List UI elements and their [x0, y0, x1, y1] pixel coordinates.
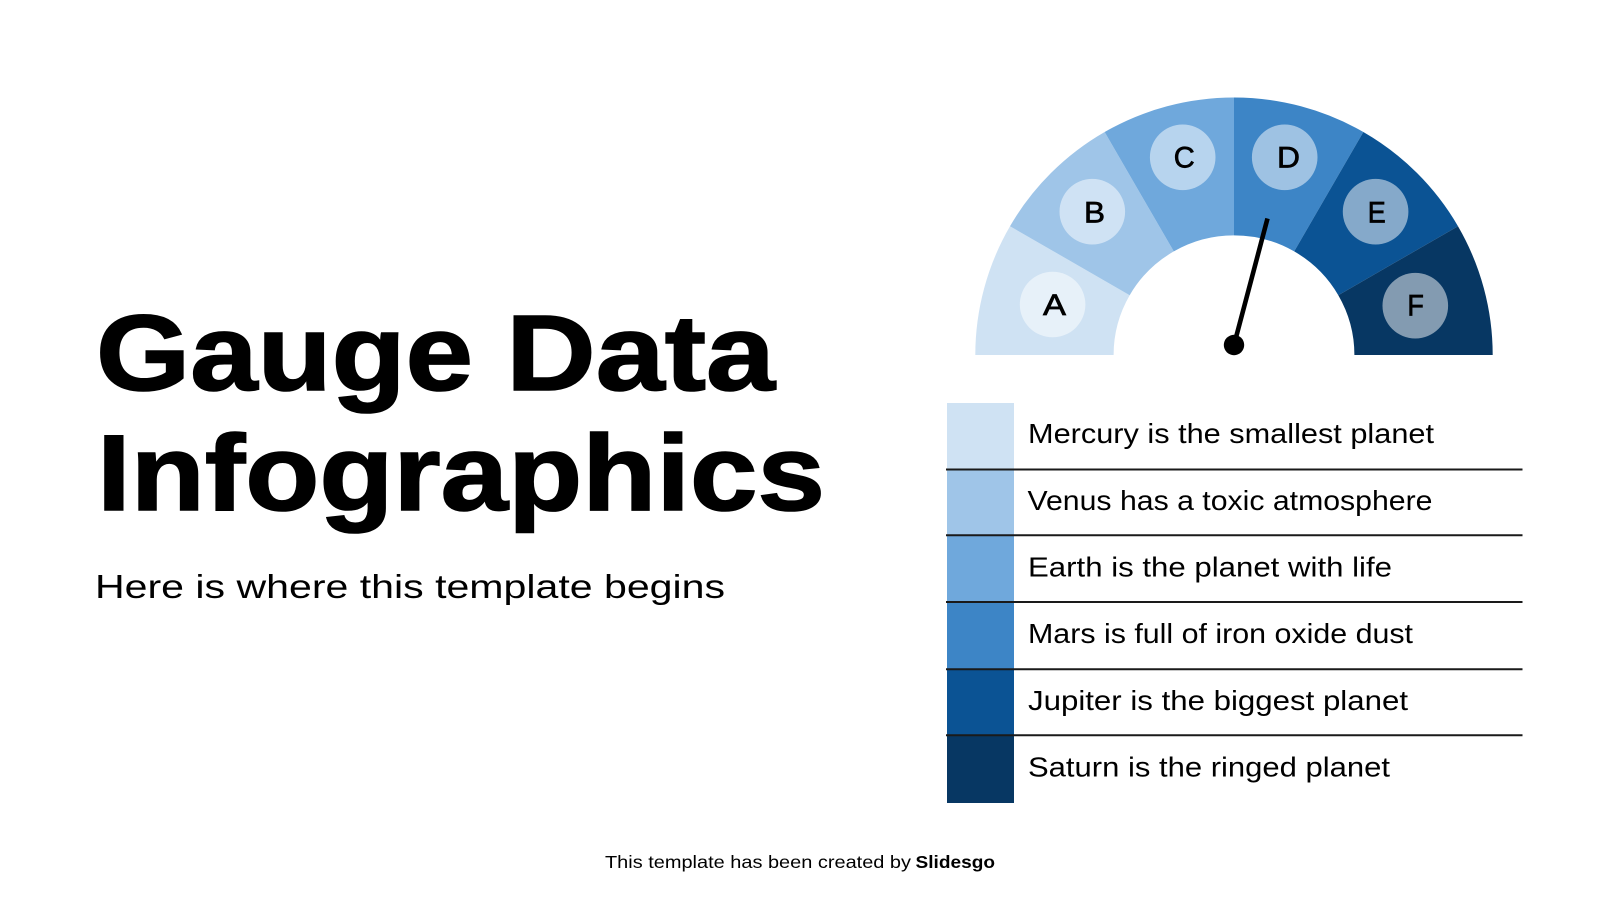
legend row: Mars: [947, 602, 1413, 670]
gauge segment B: [1010, 132, 1174, 295]
legend row: Earth: [947, 536, 1392, 602]
legend row: Jupiter: [947, 670, 1408, 736]
badge A: A: [1043, 289, 1066, 322]
badge F: F: [1407, 290, 1424, 322]
legend row: Mars: Mars is full of iron oxide dust: [1028, 618, 1413, 649]
legend row: Venus: Venus has a toxic atmosphere: [1028, 485, 1432, 516]
legend row: Saturn: Saturn is the ringed planet: [1028, 752, 1390, 783]
footer credit: Slidesgo: [916, 852, 995, 872]
legend row: Mercury: [947, 403, 1434, 470]
gauge segment C: [1105, 98, 1234, 251]
legend row: Saturn: [947, 736, 1390, 803]
legend row: Jupiter: Jupiter is the biggest planet: [1028, 685, 1408, 716]
footer credit: This template has been created by: [605, 852, 911, 872]
gauge segment D: [1234, 98, 1363, 251]
legend row: Mercury: Mercury is the smallest planet: [1028, 418, 1434, 449]
title: Gauge: [96, 292, 473, 413]
subtitle: Here is where this template begins: [95, 568, 725, 605]
legend: [946, 403, 1522, 803]
title: Data: [506, 292, 776, 413]
gauge segment A: [975, 226, 1130, 355]
gauge chart: [975, 98, 1493, 355]
footer credit: [605, 852, 995, 872]
badge D: [1252, 124, 1317, 190]
gauge needle: [1224, 218, 1268, 355]
badge A: [1020, 272, 1085, 337]
badge C: C: [1174, 142, 1195, 175]
gauge segment E: [1294, 132, 1458, 295]
badge C: [1150, 124, 1215, 190]
badge B: [1060, 179, 1125, 244]
badge F: [1382, 273, 1448, 339]
gauge segment F: [1338, 226, 1493, 355]
legend row: Venus: [947, 470, 1432, 536]
legend row: Earth: Earth is the planet with life: [1028, 552, 1392, 583]
badge D: D: [1277, 142, 1300, 175]
badge E: E: [1368, 196, 1386, 229]
badge B: B: [1084, 196, 1105, 229]
title: Infographics: [97, 412, 825, 533]
badge E: [1343, 179, 1408, 244]
title: [96, 292, 825, 533]
